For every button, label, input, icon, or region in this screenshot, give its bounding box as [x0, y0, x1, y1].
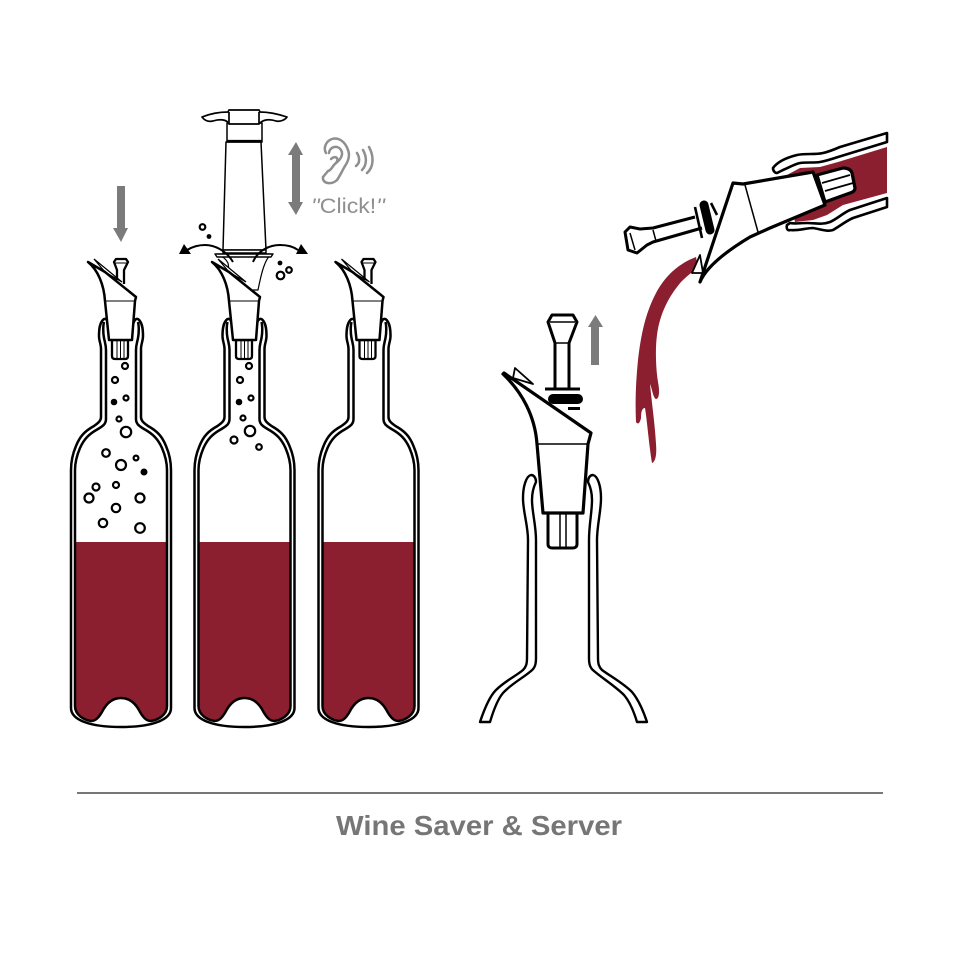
bottle 2: vacuum pump on stopper — [194, 110, 294, 727]
bubbles in bottle 1 — [84, 363, 146, 533]
divider line — [77, 792, 883, 794]
wine stream — [636, 257, 698, 463]
title: Wine Saver & Server — [336, 810, 622, 841]
air escape arrows and bubbles — [179, 224, 308, 279]
bottle neck — [480, 475, 536, 722]
discs — [545, 388, 580, 390]
vacuum pump — [202, 110, 287, 290]
discs — [695, 207, 702, 238]
bottle 1: pouring stopper pressed down, bubbles rising — [71, 259, 171, 727]
pourer body — [503, 373, 591, 513]
tube — [548, 513, 577, 548]
arrow: pump up and down — [288, 142, 303, 215]
flap — [692, 255, 703, 273]
rod and knob — [548, 315, 577, 388]
pourer body — [700, 172, 825, 282]
tilted bottle walls — [773, 133, 887, 173]
arrow: press down — [113, 186, 128, 242]
bottle pouring wine — [625, 133, 887, 463]
arrow: lift rod up — [588, 315, 603, 365]
rod — [625, 217, 702, 253]
tube — [817, 168, 855, 202]
wine in tilted bottle — [785, 147, 887, 222]
bubbles in bottle 2 — [230, 363, 262, 450]
opened bottle neck with pourer rod raised — [480, 315, 647, 722]
bottle 3: sealed bottle with stopper — [318, 259, 418, 727]
flap — [513, 368, 533, 384]
text: Click: ''Click!'' — [311, 195, 386, 218]
icon: ear with sound waves — [323, 138, 373, 183]
